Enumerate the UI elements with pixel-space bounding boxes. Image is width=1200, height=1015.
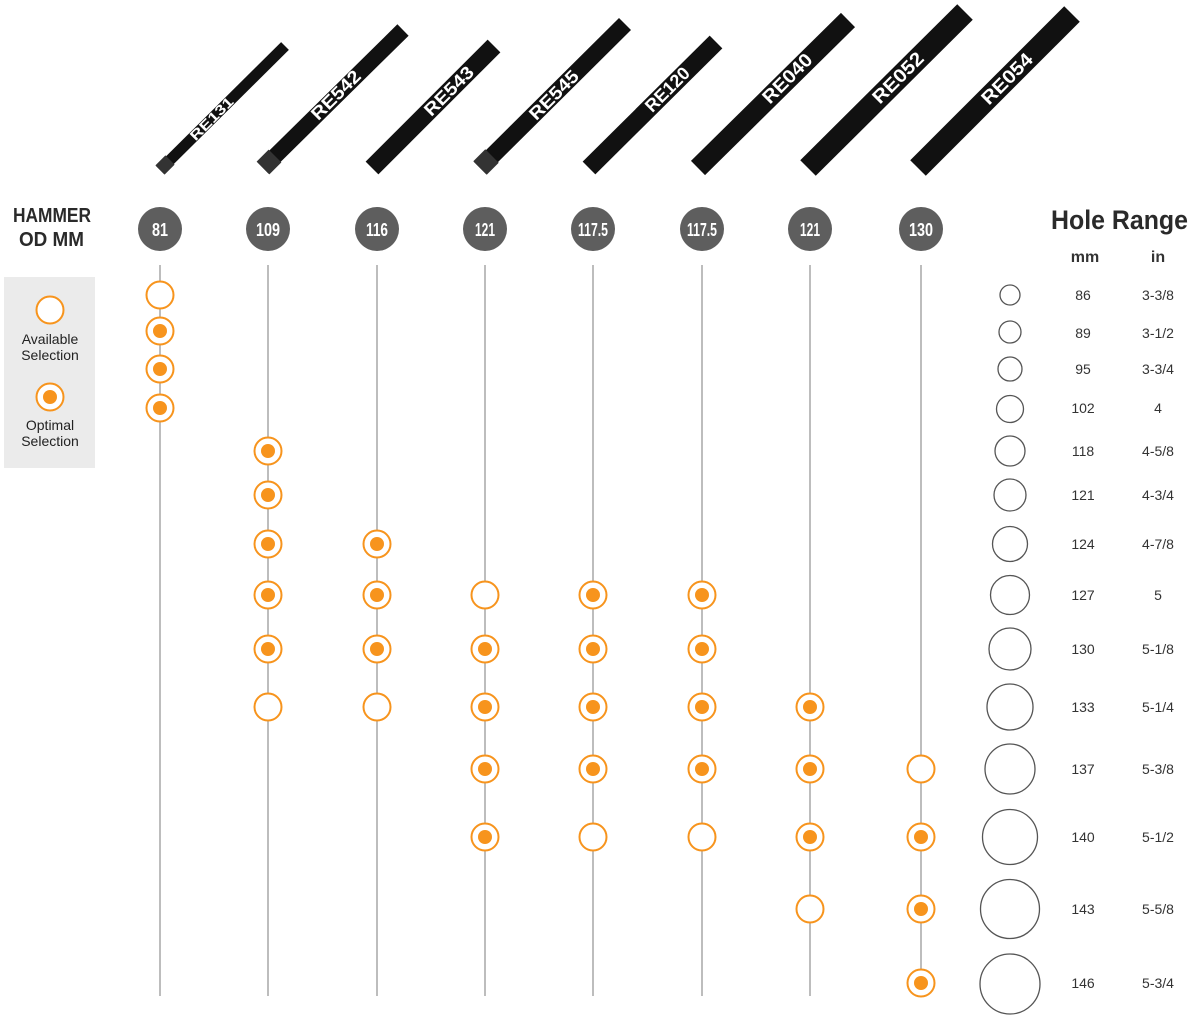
OD badges: 109 [256,220,280,240]
selection markers [146,282,934,996]
OD badges: 81 [152,220,168,240]
vertical lines [160,265,921,996]
hole range heading: mm [1071,249,1099,266]
hole range table: 143 [1071,901,1095,917]
OD badges: 121 [475,220,495,240]
hole range table: 4 [1154,400,1162,416]
legend panel: Optimal [26,417,74,433]
hammers: RE054 [978,49,1038,109]
hole range table [980,285,1174,1014]
hole range table: 124 [1071,536,1095,552]
hammers [160,12,1072,170]
hammers: RE131 [186,93,237,144]
hole range heading: Hole Range [1051,205,1188,235]
hammers: RE052 [869,48,929,108]
hole range table: 121 [1071,487,1095,503]
legend panel: Selection [21,433,79,449]
hole range table: 5-1/2 [1142,829,1174,845]
hole range table: 5 [1154,587,1162,603]
hole range table: 130 [1071,641,1095,657]
hammers: RE542 [307,66,365,124]
hole range table: 133 [1071,699,1095,715]
hammers: RE040 [759,50,817,108]
OD badges: 130 [909,220,933,240]
hole range table: 4-3/4 [1142,487,1174,503]
hole range table: 146 [1071,975,1095,991]
hole range table: 3-3/4 [1142,361,1174,377]
OD badges: 117.5 [578,220,608,240]
hole range table: 5-5/8 [1142,901,1174,917]
hole range table: 5-1/4 [1142,699,1174,715]
OD badges [138,207,943,251]
hole range table: 137 [1071,761,1095,777]
hammers: RE545 [525,66,583,124]
heading: hammer od mm [13,205,91,251]
hole range table: 3-3/8 [1142,287,1174,303]
hole range table: 95 [1075,361,1091,377]
hole range heading: in [1151,249,1165,266]
OD badges: 117.5 [687,220,717,240]
legend panel [4,277,95,468]
hole range table: 5-3/4 [1142,975,1174,991]
hole range table: 5-3/8 [1142,761,1174,777]
hole range table: 102 [1071,400,1095,416]
OD badges: 121 [800,220,820,240]
hole range table: 3-1/2 [1142,325,1174,341]
hole range table: 140 [1071,829,1095,845]
heading: hammer od mm: OD MM [19,229,84,251]
hole range table: 4-5/8 [1142,443,1174,459]
hole range table: 89 [1075,325,1091,341]
heading: hammer od mm: HAMMER [13,205,91,227]
hole range table: 127 [1071,587,1095,603]
legend panel: Selection [21,347,79,363]
hole range heading [1051,205,1188,266]
hammers: RE120 [641,63,694,116]
OD badges: 116 [366,220,388,240]
hammers: RE543 [420,62,478,120]
hole range table: 118 [1072,443,1094,459]
legend panel: Available [22,331,78,347]
hole range table: 5-1/8 [1142,641,1174,657]
hole range table: 4-7/8 [1142,536,1174,552]
hole range table: 86 [1075,287,1091,303]
